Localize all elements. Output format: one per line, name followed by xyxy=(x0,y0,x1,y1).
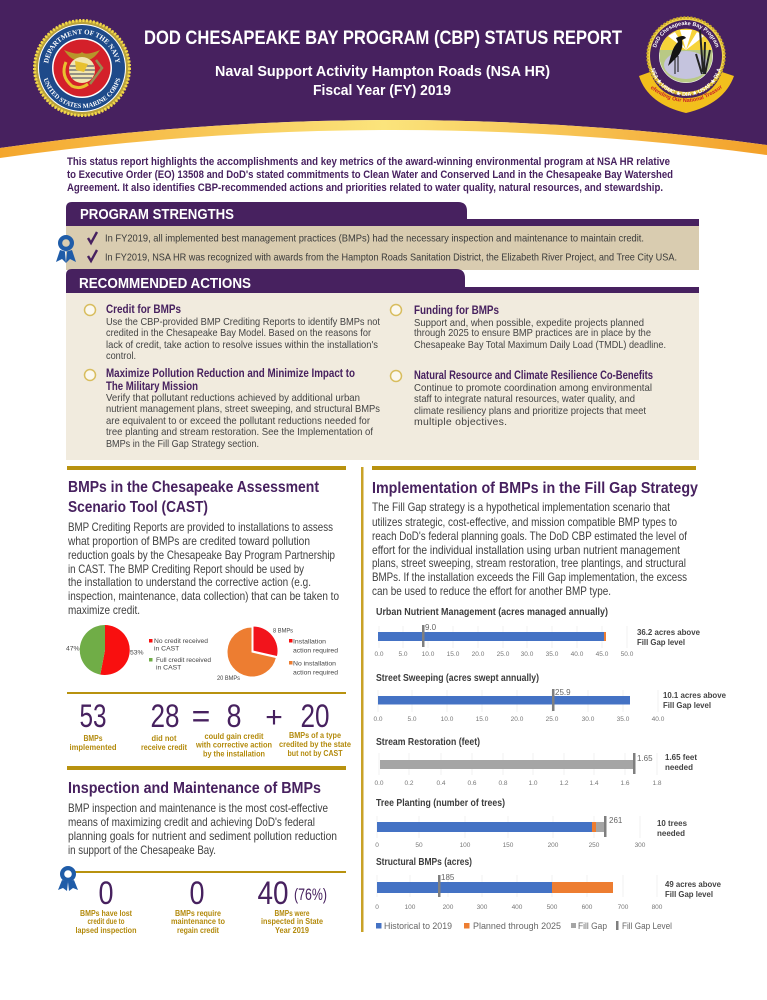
chart: stream restoration: 1.65 feet xyxy=(665,752,697,762)
icon: DoD Chesapeake Bay Program seal xyxy=(639,16,734,113)
stat: inspected: (76%) xyxy=(294,885,327,904)
stat: lost credit: BMPs have lost xyxy=(80,909,132,918)
fill gap body text: effort for the individual installation using urban nutrient management xyxy=(372,543,681,557)
CAST body text: what proportion of BMPs are credited toward pollution xyxy=(67,534,310,548)
action: natural resource co-benefits: multiple objectives. xyxy=(414,416,507,428)
chart: urban nutrient management: 10.0 xyxy=(422,651,435,658)
chart: urban nutrient management: Fill Gap level xyxy=(637,637,685,647)
chart: street sweeping: Street Sweeping (acres swept annually) xyxy=(376,673,539,684)
stat: require maintenance xyxy=(171,875,225,935)
icon: award ribbon xyxy=(56,235,76,263)
inspection body text xyxy=(68,801,337,857)
stat: lost credit xyxy=(76,875,137,935)
chart: stream restoration: 0.4 xyxy=(436,780,446,787)
CAST heading: Scenario Tool (CAST) xyxy=(68,499,208,516)
stat: lost credit: lapsed inspection xyxy=(76,926,137,935)
chart: structural BMPs: 400 xyxy=(512,904,523,911)
stat: BMPs implemented: implemented xyxy=(70,743,117,752)
chart: street sweeping: 25.9 xyxy=(555,688,571,697)
action: maximize pollution reduction: nutrient management plans, street sweeping, and structural BMPs xyxy=(106,403,380,415)
chart: street sweeping: 10.1 acres above xyxy=(663,690,726,700)
action: credit for BMPs: control. xyxy=(106,350,136,362)
recommended actions heading tab: RECOMMENDED ACTIONS xyxy=(79,275,251,292)
pie chart: credit received: in CAST xyxy=(154,646,179,652)
fill gap body text: utilizes strategic, cost-effective, and mission compatible BMP types to xyxy=(372,515,677,529)
CAST body text: the installation to understand the corrective action (e.g. xyxy=(68,575,311,589)
chart: urban nutrient management: 0.0 xyxy=(374,651,384,658)
chart: stream restoration: 1.0 xyxy=(528,780,538,787)
chart: structural BMPs: 500 xyxy=(547,904,558,911)
action: natural resource co-benefits: climate resiliency plans and prioritize projects that meet xyxy=(414,405,646,417)
chart: street sweeping: 35.0 xyxy=(617,716,630,723)
icon: check mark xyxy=(88,250,97,261)
stat: could gain credit: by the installation xyxy=(203,750,265,758)
action: credit for BMPs: Use the CBP-provided BMP Crediting Reports to identify BMPs not xyxy=(106,316,380,328)
stat: could gain credit xyxy=(195,698,272,758)
inspection heading: Inspection and Maintenance of BMPs xyxy=(68,780,321,797)
pie chart: action required: No installation xyxy=(293,660,336,668)
chart: stream restoration: needed xyxy=(665,762,693,772)
action: maximize pollution reduction: BMPs in the Fill Gap Strategy section. xyxy=(106,438,259,450)
pie chart: action required: Installation xyxy=(293,638,326,646)
chart: tree planting: 250 xyxy=(589,842,600,849)
intro paragraph: to Executive Order (EO) 13508 and DoD's stated commitments to Clean Water and Conserved Land in the Chesapeake Bay Watershed xyxy=(67,169,673,181)
stat: require maintenance: BMPs require xyxy=(175,909,221,918)
stat: did not receive credit: receive credit xyxy=(141,743,187,752)
pie chart: credit received: No credit received xyxy=(154,638,208,645)
chart: structural BMPs: 800 xyxy=(652,904,663,911)
action: maximize pollution reduction: The Military Mission xyxy=(106,381,198,393)
stat: could gain credit: 8 xyxy=(226,698,242,734)
CAST body text: BMP Crediting Reports are provided to installations to assess xyxy=(68,520,333,534)
chart: street sweeping: 15.0 xyxy=(476,716,489,723)
chart: urban nutrient management: Urban Nutrient Management (acres managed annually) xyxy=(376,607,608,618)
stat: BMPs implemented: 53 xyxy=(80,698,106,734)
chart: stream restoration: 0.6 xyxy=(467,780,477,787)
stat: inspected: BMPs were xyxy=(274,909,310,918)
intro paragraph: This status report highlights the accomplishments and key metrics of the award-winning environmental program at NSA HR relative xyxy=(67,156,670,168)
stat: BMPs implemented xyxy=(70,698,117,752)
stat: require maintenance: regain credit xyxy=(177,926,219,935)
chart: urban nutrient management: 9.0 xyxy=(425,623,437,632)
chart: urban nutrient management: 20.0 xyxy=(472,651,485,658)
inspection body text: in support of the Chesapeake Bay. xyxy=(68,843,216,857)
action: funding for BMPs: Chesapeake Bay Total Maximum Daily Load (TMDL) deadline. xyxy=(414,339,666,351)
program strengths heading tab xyxy=(66,202,699,226)
chart: tree planting: 300 xyxy=(635,842,646,849)
chart: structural BMPs: 300 xyxy=(477,904,488,911)
stat: could gain credit: with corrective action xyxy=(195,740,272,750)
chart: stream restoration: Stream Restoration (feet) xyxy=(376,737,480,748)
action: natural resource co-benefits xyxy=(390,370,653,428)
chart: street sweeping xyxy=(373,673,726,723)
pie chart: credit received: 53% xyxy=(130,650,144,656)
icon: DoD Chesapeake Bay Program seal: DoD Chesapeake Bay Program xyxy=(652,21,718,48)
chart: structural BMPs: Fill Gap level xyxy=(665,889,713,899)
chart: urban nutrient management: 45.0 xyxy=(596,651,609,658)
chart: structural BMPs: 200 xyxy=(443,904,454,911)
action: maximize pollution reduction xyxy=(84,368,380,450)
chart: street sweeping: 25.0 xyxy=(546,716,559,723)
stat: BMPs of a type: but not by CAST xyxy=(288,749,343,758)
fill gap body text: can be used to reduce the effort for another BMP type. xyxy=(372,584,611,598)
chart: structural BMPs: 700 xyxy=(618,904,629,911)
chart: structural BMPs: 600 xyxy=(582,904,593,911)
stat: could gain credit: could gain credit xyxy=(204,732,264,741)
program strengths heading tab: PROGRAM STRENGTHS xyxy=(80,206,234,223)
chart: stream restoration: 1.2 xyxy=(559,780,569,787)
CAST body text: in CAST. The BMP Crediting Report should be used by xyxy=(68,562,304,576)
chart: stream restoration: 0.0 xyxy=(374,780,384,787)
chart: structural BMPs: 0 xyxy=(375,904,379,911)
chart: structural BMPs: 185 xyxy=(441,873,455,882)
title: DOD CHESAPEAKE BAY PROGRAM (CBP) STATUS REPORT xyxy=(144,27,622,49)
stat: did not receive credit xyxy=(141,698,187,752)
panel: program strengths xyxy=(56,202,699,270)
chart: structural BMPs xyxy=(375,857,721,911)
icon: DoD Chesapeake Bay Program seal: NSA ★ USMC ★ DIA ★ USAF ★ DLA xyxy=(651,68,721,96)
chart: urban nutrient management: 36.2 acres above xyxy=(637,627,700,637)
stat: BMPs of a type: 20 xyxy=(300,698,330,734)
CAST body text: inspection, maintenance, data collection) that can be taken to xyxy=(68,589,339,603)
chart: tree planting xyxy=(375,798,687,849)
chart: urban nutrient management: 40.0 xyxy=(571,651,584,658)
stat: BMPs of a type: BMPs of a type xyxy=(289,731,341,740)
chart: street sweeping: Fill Gap level xyxy=(663,700,711,710)
action: funding for BMPs: through 2025 to ensure BMP practices are in place by the xyxy=(414,327,651,339)
fill gap body text: The Fill Gap strategy is a hypothetical implementation scenario that xyxy=(372,500,671,514)
pie chart: credit received: 47% xyxy=(66,646,80,652)
subtitle xyxy=(215,63,550,99)
chart: tree planting: 200 xyxy=(548,842,559,849)
chart: stream restoration: 0.2 xyxy=(404,780,414,787)
fill gap body text xyxy=(372,500,688,598)
chart legend: Historical to 2019 xyxy=(384,921,452,932)
chart legend xyxy=(376,921,672,932)
strength: awards: In FY2019, NSA HR was recognized with awards from the Hampton Roads Sanitation District, the Elizabeth River Project, and Tree City USA. xyxy=(105,252,677,264)
stat: lost credit: credit due to xyxy=(88,917,125,926)
pie chart: action required: 20 BMPs xyxy=(217,675,240,682)
chart legend: Fill Gap Level xyxy=(622,921,672,932)
chart: street sweeping: 30.0 xyxy=(582,716,595,723)
panel: recommended actions xyxy=(66,269,699,460)
stat: lost credit: 0 xyxy=(98,875,114,911)
stat: inspected xyxy=(258,875,327,935)
stat: inspected: 40 xyxy=(258,875,288,911)
action: natural resource co-benefits: Natural Resource and Climate Resilience Co-Benefits xyxy=(414,370,653,382)
pie chart: credit received: Full credit received xyxy=(156,657,211,664)
action: maximize pollution reduction: tree planting and stream restoration. See the Implementation of xyxy=(106,426,373,438)
chart: tree planting: 10 trees xyxy=(657,818,687,828)
chart: urban nutrient management: 15.0 xyxy=(447,651,460,658)
chart: tree planting: needed xyxy=(657,828,685,838)
panel: fill gap strategy xyxy=(372,466,726,932)
chart: tree planting: 100 xyxy=(460,842,471,849)
inspection body text: planning goals for nutrient and sediment pollution reduction xyxy=(68,829,337,843)
chart: street sweeping: 0.0 xyxy=(373,716,383,723)
stat: BMPs of a type xyxy=(279,698,351,758)
pie chart: action required: 8 BMPs xyxy=(273,628,294,634)
stat: inspected: inspected in State xyxy=(261,917,323,926)
stat: require maintenance: maintenance to xyxy=(171,917,225,926)
fill gap body text: plans, street sweeping, stream restoration, tree plantings, and structural xyxy=(372,556,686,570)
panel: BMPs in CAST xyxy=(66,466,351,770)
CAST heading xyxy=(68,479,320,516)
inspection body text: BMP inspection and maintenance is the most cost-effective xyxy=(68,801,328,815)
chart: urban nutrient management: 30.0 xyxy=(521,651,534,658)
pie chart: action required xyxy=(217,626,338,682)
pie chart: credit received xyxy=(66,625,211,675)
action: credit for BMPs: credited in the Chesapeake Bay Model. Based on the reasons for xyxy=(106,327,371,339)
chart: structural BMPs: 100 xyxy=(405,904,416,911)
chart legend: Planned through 2025 xyxy=(473,921,561,932)
pie chart: action required: action required xyxy=(293,648,338,654)
action: maximize pollution reduction: Verify that pollutant reductions achieved by additional urban xyxy=(106,392,360,404)
CAST body text xyxy=(67,520,339,617)
chart: tree planting: 261 xyxy=(609,816,623,825)
action: maximize pollution reduction: are equivalent to or exceed the pollutant reductions needed for xyxy=(106,415,370,427)
icon: award ribbon xyxy=(58,866,78,891)
equals sign: = xyxy=(192,698,210,734)
recommended actions heading tab xyxy=(66,269,699,293)
pie chart: action required: action required xyxy=(293,670,338,676)
title xyxy=(144,27,622,99)
chart: urban nutrient management xyxy=(374,607,700,658)
CAST heading: BMPs in the Chesapeake Assessment xyxy=(68,479,320,496)
chart: structural BMPs: Structural BMPs (acres) xyxy=(376,857,472,868)
chart: stream restoration: 0.8 xyxy=(498,780,508,787)
chart: urban nutrient management: 35.0 xyxy=(546,651,559,658)
chart: tree planting: 0 xyxy=(375,842,379,849)
panel: inspection and maintenance xyxy=(58,780,346,935)
action: funding for BMPs: Support and, when possible, expedite projects planned xyxy=(414,317,644,329)
chart: structural BMPs: 49 acres above xyxy=(665,879,721,889)
stat: BMPs of a type: credited by the state xyxy=(279,740,351,749)
intro paragraph: Agreement. It also identifies CBP-recommended actions and priorities related to water quality, natural resources, and stewardship. xyxy=(67,182,663,194)
stat: require maintenance: 0 xyxy=(190,875,204,911)
chart: urban nutrient management: 25.0 xyxy=(497,651,510,658)
strength: BMP inspection: In FY2019, all implemented best management practices (BMPs) had the necessary inspection and maintenance to maintain credit. xyxy=(105,232,644,244)
plus sign: + xyxy=(265,701,283,734)
fill gap body text: reach DoD's federal planning goals. The DoD CBP estimated the level of xyxy=(372,529,688,543)
stat: BMPs implemented: BMPs xyxy=(84,734,103,743)
chart: tree planting: 150 xyxy=(503,842,514,849)
stat: did not receive credit: 28 xyxy=(150,698,180,734)
icon: Department of the Navy seal: UNITED STATES MARINE CORPS xyxy=(44,78,120,108)
action: credit for BMPs: lack of credit, take action to resolve issues within the installation's xyxy=(106,339,378,351)
chart: street sweeping: 40.0 xyxy=(652,716,665,723)
chart: street sweeping: 10.0 xyxy=(441,716,454,723)
action: credit for BMPs: Credit for BMPs xyxy=(106,304,181,316)
action: funding for BMPs: Funding for BMPs xyxy=(414,305,499,317)
chart: stream restoration: 1.8 xyxy=(652,780,662,787)
chart: street sweeping: 5.0 xyxy=(407,716,417,723)
pie chart: credit received: in CAST xyxy=(156,664,181,672)
action: maximize pollution reduction: Maximize Pollution Reduction and Minimize Impact to xyxy=(106,368,355,380)
action: natural resource co-benefits: Continue to promote coordination among environmental xyxy=(414,382,652,394)
chart: tree planting: 50 xyxy=(415,842,423,849)
chart: urban nutrient management: 50.0 xyxy=(621,651,634,658)
CAST body text: reduction goals by the Chesapeake Bay Program Partnership xyxy=(68,548,335,562)
chart: street sweeping: 20.0 xyxy=(511,716,524,723)
chart: stream restoration: 1.6 xyxy=(620,780,630,787)
icon: Department of the Navy seal xyxy=(33,19,131,117)
chart: stream restoration: 1.65 xyxy=(637,754,653,763)
action: funding for BMPs xyxy=(390,304,666,351)
chart: stream restoration xyxy=(374,737,697,787)
action: natural resource co-benefits: staff to integrate natural resources, water quality, and xyxy=(414,393,635,405)
stat: inspected: Year 2019 xyxy=(275,926,309,935)
intro paragraph xyxy=(67,156,673,194)
stat: did not receive credit: did not xyxy=(152,734,177,743)
icon: Department of the Navy seal: DEPARTMENT OF THE NAVY xyxy=(44,29,120,64)
fill gap heading: Implementation of BMPs in the Fill Gap Strategy xyxy=(372,480,698,497)
inspection body text: means of maximizing credit and achieving DoD's federal xyxy=(68,815,315,829)
icon: check mark xyxy=(88,232,97,243)
action: credit for BMPs xyxy=(84,304,380,362)
chart legend: Fill Gap xyxy=(578,921,607,932)
subtitle: Fiscal Year (FY) 2019 xyxy=(313,82,451,99)
header banner xyxy=(0,0,767,158)
chart: tree planting: Tree Planting (number of trees) xyxy=(376,798,505,809)
CAST body text: maximize credit. xyxy=(68,603,140,617)
chart: stream restoration: 1.4 xyxy=(589,780,599,787)
subtitle: Naval Support Activity Hampton Roads (NSA HR) xyxy=(215,63,550,80)
fill gap body text: BMPs. If the installation exceeds the Fill Gap implementation, the excess xyxy=(372,570,687,584)
chart: urban nutrient management: 5.0 xyxy=(398,651,408,658)
